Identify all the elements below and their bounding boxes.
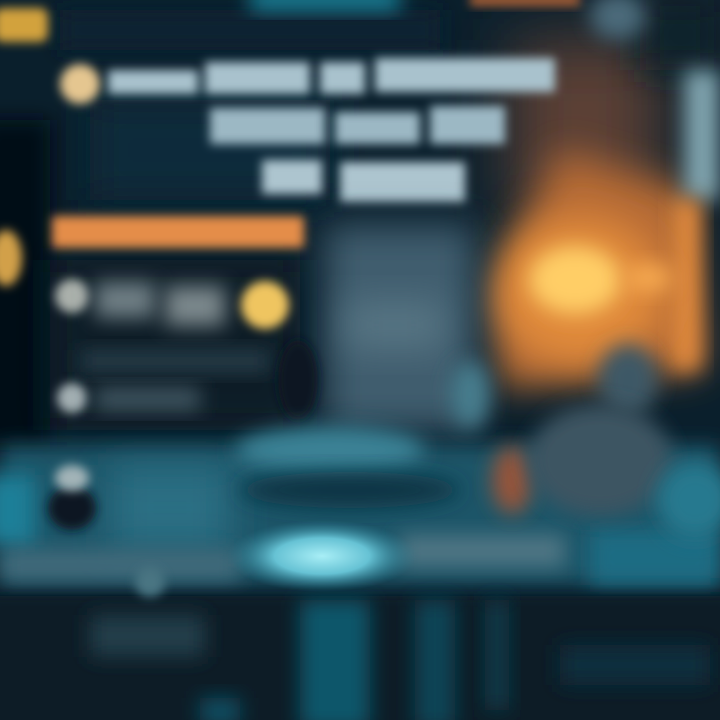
glowing pool of light — [227, 520, 417, 592]
orange base glow — [492, 446, 532, 514]
text block: second row — [57, 383, 200, 413]
orange heading bar — [52, 216, 304, 248]
icon: left yellow circle — [0, 230, 22, 286]
dark figure — [278, 340, 318, 420]
panel: lower dark area — [0, 567, 720, 720]
seated figure — [450, 344, 720, 538]
top bar accents — [0, 0, 646, 42]
title line 1 — [108, 58, 555, 94]
title block — [60, 58, 555, 202]
panel: centre column — [325, 225, 475, 430]
bottle icon — [48, 465, 96, 530]
text block: list row — [55, 279, 289, 372]
panel: teal desk band — [0, 426, 720, 585]
title line 2 — [210, 106, 505, 144]
panel: right warm backdrop — [490, 0, 720, 390]
icon: title bullet — [60, 64, 100, 104]
title line 3 — [262, 160, 465, 202]
